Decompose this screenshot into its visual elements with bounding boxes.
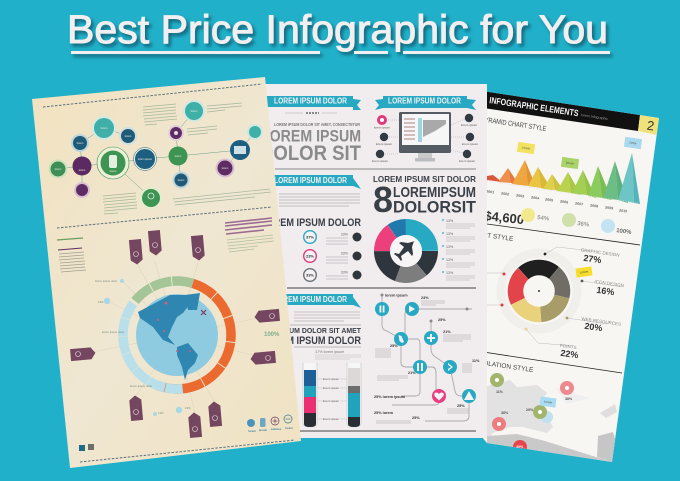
bubble labels: lorem ipsum: [138, 157, 152, 161]
percent rings list: 37%: [306, 234, 314, 240]
icons around monitor: lorem ipsum: [372, 159, 389, 163]
donut legend: 13%: [446, 271, 454, 275]
text block: [294, 312, 360, 321]
map labels: 29%: [526, 408, 534, 412]
flow chart: [374, 294, 480, 423]
map labels: 11%: [496, 390, 504, 394]
percent rings list: 33%: [341, 270, 349, 274]
callout: yellow: [517, 142, 535, 154]
title: Best Price Infographic for You: [67, 8, 608, 52]
header band: [487, 92, 659, 135]
bubble flow diagram: [48, 100, 271, 214]
flow nodes: [375, 302, 476, 403]
callout: donut tag: Lorem: [580, 269, 589, 275]
tube note: [315, 350, 361, 359]
flow labels: 25%: [390, 344, 398, 348]
small globe dots and percent: 13%: [158, 411, 164, 415]
callout: blue: Dolor: [629, 141, 637, 145]
year labels: 2003: [516, 193, 524, 199]
percent rings list: [304, 231, 362, 281]
panel: left sheet, globe infographic: [32, 77, 301, 468]
stat: 54 percent: 54%: [537, 215, 550, 223]
ring segments: [101, 259, 253, 411]
donut labels: 22%: [560, 348, 579, 360]
text block: [279, 194, 360, 206]
subheading: LOREM IPSUM DOLOR SIT AMET, CONSECTETUR: [274, 122, 360, 128]
stat: 100 percent: 100%: [616, 228, 632, 236]
bubble labels: lorem: [191, 109, 197, 113]
ribbon heading 1: [262, 96, 361, 110]
heading: 8 loremipsum dolorsit: [373, 174, 477, 220]
heading: chart style: PIE CHART STYLE: [456, 228, 514, 243]
flow labels: 21%: [408, 371, 416, 375]
tube labels: lorem ipsum: [323, 399, 340, 403]
percent rings list: 33%: [341, 252, 349, 256]
ribbon heading 3: LOREM IPSUM DOLOR: [274, 176, 347, 185]
stat: 36 percent: 36%: [577, 221, 590, 229]
tube labels: lorem ipsum: [323, 386, 340, 390]
heading: 8 loremipsum dolorsit: LOREM IPSUM SIT DOLOR: [373, 174, 476, 184]
year labels: 2010: [619, 208, 627, 214]
icons around monitor: [372, 114, 479, 163]
donut labels: 20%: [584, 321, 603, 333]
tube labels: lorem ipsum: [323, 377, 340, 381]
year labels: [486, 189, 627, 214]
icons around monitor: lorem ipsum: [374, 126, 391, 130]
heading: sit amet: LOREM IPSUM DOLOR SIT AMET: [251, 326, 361, 335]
tube chart 1: [303, 363, 317, 427]
bubble labels: lorem: [178, 178, 184, 182]
purple tags: [70, 230, 280, 438]
right bars block: [225, 218, 274, 252]
donut labels: GRAPHIC DESIGN: [581, 247, 620, 258]
callout: yellow: Lorem: [522, 145, 531, 151]
small globe dots and percent: 13%: [98, 300, 104, 304]
icons around monitor: lorem ipsum: [462, 142, 479, 146]
flow labels: 25%: [412, 416, 420, 420]
bubble labels: lorem: [175, 154, 181, 158]
year labels: 2008: [590, 203, 598, 209]
bubble labels: lorem: [222, 166, 228, 170]
callout: green: [561, 157, 579, 169]
heading: 8 loremipsum dolorsit: LOREMIPSUM: [393, 184, 476, 201]
flow labels: 25% lorem ipsum: [374, 395, 406, 399]
heading: sit amet: LOREM IPSUM DOLOR: [261, 335, 361, 347]
year labels: 2001: [486, 189, 494, 195]
flow labels: 25%: [438, 318, 446, 322]
ribbon heading 3: [262, 175, 361, 189]
callout: blue: [624, 137, 642, 149]
bubble text blocks: [103, 103, 271, 214]
globe chart: [83, 259, 267, 414]
donut legend: [442, 219, 475, 280]
panel: right sheet, infographic elements: [482, 92, 659, 462]
header band: lorem Infographic: [581, 113, 608, 121]
bubble labels: lorem: [55, 167, 61, 171]
flow labels: 25% lorem: [374, 411, 394, 415]
legend: lorem: [248, 429, 256, 433]
small globe dots and percent: lorem ipsum dolor: [102, 330, 124, 334]
callout: map tag: Lorem: [544, 399, 553, 405]
stat: 36 percent: [562, 213, 589, 227]
icons around monitor: lorem ipsum: [376, 142, 393, 146]
connector lines: [382, 295, 472, 421]
legend: [247, 415, 293, 433]
icons around monitor: lorem ipsum: [461, 123, 478, 127]
year labels: 2007: [575, 201, 583, 207]
tube labels: [318, 377, 347, 421]
bubble labels: lorem: [77, 141, 83, 145]
bubble labels: lorem: [79, 168, 85, 172]
continents: [138, 293, 200, 380]
percent rings list: 23%: [306, 254, 314, 258]
stat: 54 percent: [521, 208, 550, 223]
legend: ipsum: [259, 428, 268, 432]
map labels: 38%: [565, 397, 573, 401]
legend: lorem: [285, 426, 293, 430]
tube labels: lorem ipsum: [323, 417, 340, 421]
stat: total: $4,600: [484, 208, 525, 227]
big heading grey: LOREM IPSUM: [261, 126, 361, 146]
heading: pyramid chart style: PYRAMID CHART STYLE: [480, 116, 547, 133]
donut labels: [560, 247, 624, 360]
map labels: 38%: [501, 411, 509, 415]
flow labels: 25%: [457, 404, 465, 408]
header band: 2: [646, 118, 655, 134]
big heading grey: DOLOR SIT: [260, 142, 361, 165]
ribbon heading 4: LOREM IPSUM DOLOR: [274, 295, 347, 304]
pyramid chart: [486, 137, 642, 214]
map labels: [496, 390, 573, 449]
map labels: 40%: [516, 445, 524, 449]
donut labels: POINTS: [560, 343, 577, 350]
year labels: 2005: [545, 197, 553, 203]
icon: plane: [394, 241, 415, 261]
heading: 8 loremipsum dolorsit: DOLORSIT: [393, 198, 477, 216]
year labels: 2006: [560, 199, 568, 205]
panel: middle sheet, lorem ipsum: [251, 84, 487, 438]
bubble labels: lorem: [101, 126, 107, 130]
bubble nodes: [48, 100, 263, 209]
year labels: 2004: [531, 195, 539, 201]
node glyph shapes: [380, 306, 474, 400]
year labels: 2009: [605, 205, 613, 211]
donut labels: ICON DESIGN: [594, 279, 624, 288]
left notes: [57, 238, 86, 272]
heading: lorem ipsum dolor: LOREM IPSUM DOLOR: [261, 217, 361, 229]
tube note: 17% lorem ipsum: [315, 350, 344, 354]
ribbon heading 4: [262, 294, 361, 308]
page markers: [79, 444, 94, 451]
donut legend: 13%: [446, 232, 454, 236]
donut labels: 16%: [596, 285, 615, 297]
heading: population style: POPULATION STYLE: [470, 358, 534, 374]
small globe dots and percent: 100%: [264, 332, 280, 338]
callout: green: Ipsum: [566, 160, 575, 166]
donut legend: 13%: [446, 258, 454, 262]
header band: INFOGRAPHIC ELEMENTS: [489, 95, 579, 118]
map pins: [490, 373, 574, 454]
ribbon heading 2: [375, 96, 476, 110]
bubble labels: lorem: [125, 134, 131, 138]
donut with plane: [372, 217, 440, 285]
small globe dots and percent: lorem ipsum dolor: [95, 279, 117, 283]
donut chart: [487, 247, 624, 360]
flow labels: 11%: [472, 359, 480, 363]
bubble labels: [55, 109, 228, 182]
legend: calories: [271, 427, 282, 431]
heading: 8 loremipsum dolorsit: 8: [373, 179, 393, 220]
flow labels: lorem ipsum: [385, 294, 408, 298]
big heading grey: [260, 126, 361, 165]
small globe dots and percent: [95, 279, 280, 416]
donut legend: 13%: [446, 219, 454, 223]
ribbon heading 2: LOREM IPSUM DOLOR: [388, 96, 461, 105]
small globe dots and percent: lorem ipsum dolor: [130, 384, 152, 388]
small globe dots and percent: 13%: [185, 406, 191, 410]
flow labels: 21%: [443, 330, 451, 334]
flow labels: [374, 294, 480, 420]
world map with pins: [487, 373, 617, 462]
monitor icon: [399, 112, 451, 162]
percent rings list: 33%: [341, 232, 349, 236]
icons around monitor: lorem ipsum: [459, 159, 476, 163]
heading: sit amet: [251, 326, 361, 347]
ribbon heading 1: LOREM IPSUM DOLOR: [274, 96, 347, 105]
bubble labels: lorem: [110, 169, 116, 173]
percent rings list: 33%: [306, 272, 314, 278]
flow labels: 23%: [421, 296, 429, 300]
tube chart 2: [347, 363, 361, 427]
year labels: 2002: [501, 191, 509, 197]
donut legend: 13%: [446, 245, 454, 249]
donut labels: 27%: [583, 253, 602, 265]
donut labels: WEB RESOURCES: [581, 316, 621, 327]
stat: 100 percent: [601, 219, 632, 234]
